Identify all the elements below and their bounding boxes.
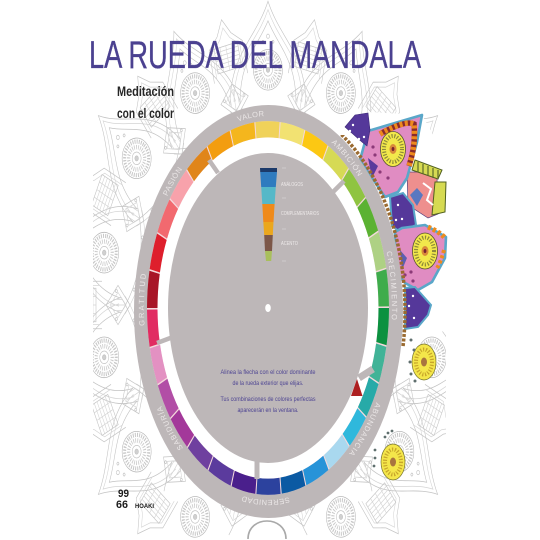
blank out line art behind colour xyxy=(345,112,447,345)
subtitle: con el color xyxy=(117,106,175,121)
wheel thumb tab at bottom xyxy=(248,521,286,539)
red pointer arrow xyxy=(351,379,362,396)
wheel: inner grey disc xyxy=(168,153,368,463)
window labels: ACENTO xyxy=(281,241,298,247)
wheel labels on curve: VALOR xyxy=(236,111,264,121)
wheel labels on curve: SERENIDAD xyxy=(242,496,290,506)
instructions text: aparecerán en la ventana. xyxy=(238,407,299,414)
publisher logo: 66 xyxy=(116,499,128,511)
purple shape: top xyxy=(345,113,370,146)
coloured petal: upper with yellow rosette xyxy=(360,115,422,197)
instructions text: Alinea la flecha con el color dominante xyxy=(220,369,316,376)
instructions text: Tus combinaciones de colores perfectas xyxy=(220,396,316,403)
coloured petal: lower with yellow rosette xyxy=(395,225,446,290)
wheel: colour segments ring xyxy=(150,127,386,489)
wheel labels on curve: PASIÓN xyxy=(163,167,182,196)
yellow rosette xyxy=(412,233,438,269)
purple shape: bottom xyxy=(405,287,431,329)
publisher logo: HOAKI xyxy=(135,504,154,510)
publisher logo: 99 xyxy=(118,488,129,500)
subtitle xyxy=(117,84,175,121)
wheel labels on curve: GRATITUD xyxy=(138,274,146,326)
yellow rosettes and dots lower right xyxy=(373,338,436,480)
wheel labels on curve: ABUNDANCIA xyxy=(349,402,380,455)
mandala line art background xyxy=(93,0,446,538)
subtitle: Meditación xyxy=(117,84,174,99)
centre pivot dot xyxy=(265,304,271,312)
yellow rosette xyxy=(380,132,406,166)
coloured tiles: upper right xyxy=(407,160,446,218)
wheel labels on curve: AMBICIÓN xyxy=(331,140,362,176)
instructions text: de la rueda exterior que elijas. xyxy=(232,380,304,387)
purple shape: middle xyxy=(390,193,416,232)
instructions text xyxy=(220,369,316,414)
window labels: COMPLEMENTARIOS xyxy=(281,211,320,217)
patterned border along the wheel xyxy=(340,135,407,346)
wheel labels on curve xyxy=(138,111,398,506)
wheel: white window ring xyxy=(157,136,379,480)
wheel labels on curve: SABIDURÍA xyxy=(157,406,182,450)
window labels: ANÁLOGOS xyxy=(281,181,304,188)
wheel labels on curve: CRECIMIENTO xyxy=(386,252,398,320)
publisher logo xyxy=(116,488,154,511)
coloured mandala section xyxy=(340,112,448,346)
window labels xyxy=(281,168,320,261)
wheel: outer grey disc xyxy=(134,105,403,518)
wheel: grey spokes across white ring xyxy=(157,160,373,479)
colour window wedge xyxy=(260,168,277,261)
